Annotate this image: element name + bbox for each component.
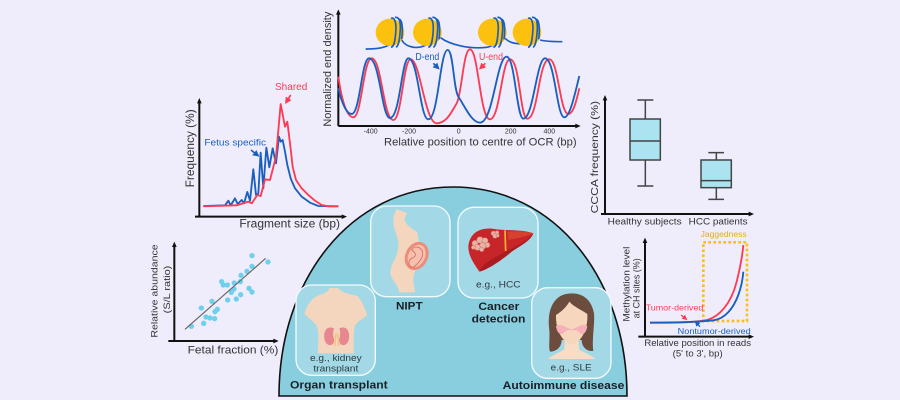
tick labels: -400: [364, 128, 378, 135]
tick labels: 0: [457, 128, 461, 135]
axes: [168, 245, 276, 341]
red shared curve: [203, 104, 338, 206]
application: organ transplant: [290, 285, 388, 392]
x-axis title: Relative position to centre of OCR (bp): [384, 136, 577, 148]
text: HCC example: e.g., HCC: [476, 279, 521, 289]
x-axis title: Relative position in reads: [644, 338, 752, 348]
y-axis title: Normalized end density: [322, 11, 334, 127]
x-axis title: (5' to 3', bp): [673, 348, 723, 358]
x-axis title: [644, 338, 752, 358]
icon: torso with kidneys: [304, 288, 367, 353]
panel: end density chart: [322, 9, 581, 148]
red U-end curve: [338, 49, 579, 123]
heading: cancer detection: [472, 301, 525, 325]
trend line: [185, 258, 266, 329]
icon: pregnant body with fetus: [390, 209, 433, 292]
y-axis title line 1: Methylation level: [621, 247, 631, 322]
card: cancer detection: [458, 207, 538, 298]
heading: organ transplant: Organ transplant: [290, 380, 388, 392]
axis arrowheads: [172, 242, 279, 343]
blue fetus specific curve: [203, 137, 338, 206]
blue nontumor curve: [650, 272, 743, 323]
heading: cancer detection: Cancer: [478, 301, 520, 313]
icon: liver with tumours: [468, 229, 533, 272]
card: organ transplant: [296, 285, 375, 375]
tick labels: [364, 128, 555, 135]
text: kidney transplant example: [310, 353, 362, 374]
label: shared: Shared: [275, 82, 307, 93]
y-axis title: CCCA frequency (%): [590, 101, 601, 213]
arrow: nontumor-derived: [696, 322, 700, 327]
card: autoimmune disease: [532, 288, 611, 378]
dome shape: [279, 187, 627, 396]
axes: [601, 98, 751, 214]
heading: cancer detection: detection: [472, 313, 525, 325]
arrow: shared: [286, 95, 291, 102]
y-axis title line 1: Relative abundance: [149, 244, 159, 338]
axes: [638, 241, 751, 337]
panel: CCCA box plot: [590, 95, 754, 226]
label: nontumor-derived: Nontumor-derived: [678, 326, 751, 336]
x-axis title: Fragment size (bp): [239, 218, 340, 231]
box: healthy subjects: [630, 100, 660, 186]
arrow: U-end: [481, 63, 485, 68]
panel: methylation jaggedness chart: [621, 230, 754, 358]
arrow: tumor-derived: [681, 315, 686, 319]
text: kidney transplant example: e.g., kidney: [310, 353, 362, 363]
jaggedness highlight box: [703, 242, 747, 321]
arrow: D-end: [433, 63, 438, 68]
label: D-end: D-end: [415, 52, 439, 63]
arrow: fetus specific: [251, 150, 258, 155]
heading: autoimmune disease: Autoimmune disease: [503, 380, 624, 392]
box: HCC patients: [701, 153, 731, 199]
label: tumor-derived: Tumor-derived: [646, 303, 704, 313]
tick labels: 400: [544, 128, 555, 135]
heading: NIPT: NIPT: [396, 300, 423, 312]
text: SLE example: e.g., SLE: [551, 363, 592, 373]
card: NIPT: [371, 206, 450, 297]
application: cancer detection: [458, 207, 538, 325]
application: NIPT: [371, 206, 450, 312]
panel: scatter plot: [149, 242, 279, 356]
tick labels: -200: [402, 128, 416, 135]
nucleosome diagram: [366, 17, 562, 49]
application: autoimmune disease: [503, 288, 624, 392]
tick labels: 200: [505, 128, 517, 135]
label: fetus specific: Fetus specific: [204, 137, 266, 147]
x-axis title: Fetal fraction (%): [188, 344, 278, 356]
y-axis title line 2: at CH sites (%): [631, 258, 641, 318]
label: U-end: U-end: [479, 52, 503, 63]
label: healthy subjects: Healthy subjects: [608, 216, 682, 226]
y-axis title: Frequency (%): [184, 109, 197, 187]
axis arrowheads: [643, 238, 754, 339]
panel: fragment size chart: [184, 82, 347, 231]
axes: [195, 101, 344, 217]
red tumor curve: [650, 245, 743, 323]
label: jaggedness: Jaggedness: [701, 230, 747, 239]
icon: face with butterfly rash: [549, 293, 595, 359]
axis arrowheads: [603, 95, 754, 216]
blue D-end curve: [338, 50, 579, 123]
axis arrowheads: [197, 98, 347, 219]
panel: clinical applications dome: [279, 187, 627, 396]
label: HCC patients: HCC patients: [689, 216, 748, 226]
data points: [189, 253, 271, 329]
axes: [338, 12, 578, 126]
y-axis title line 2: (S/L ratio): [162, 266, 172, 313]
text: kidney transplant example: transplant: [313, 364, 359, 374]
axis arrowheads: [336, 9, 581, 128]
